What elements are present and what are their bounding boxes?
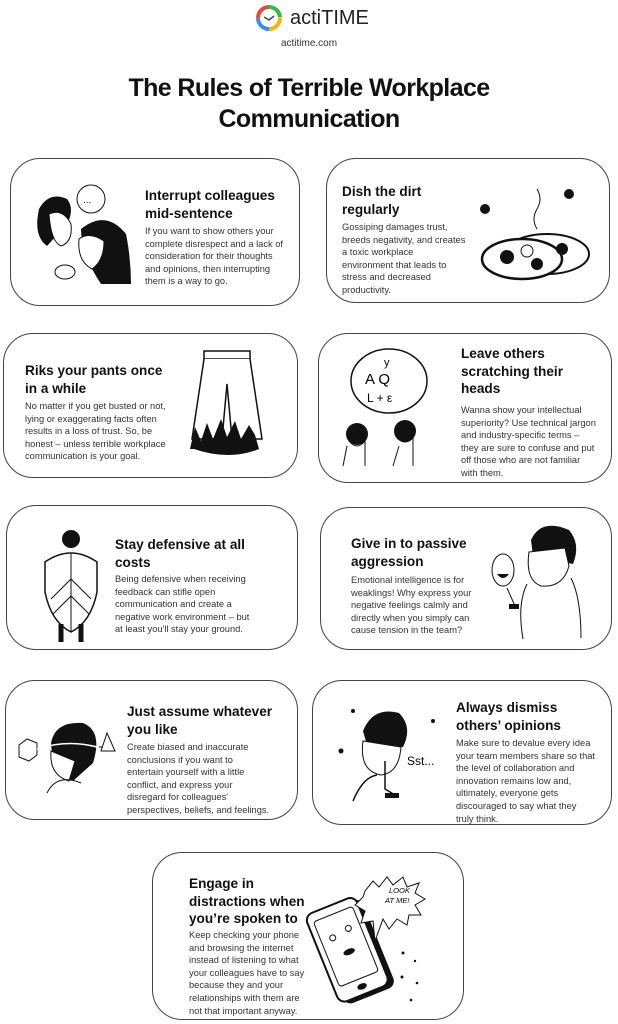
panel: passive aggression [320, 507, 612, 650]
body [127, 742, 269, 815]
illustration: two people talking [37, 184, 131, 284]
illustration: confused people [342, 348, 428, 466]
panel: defensive [6, 505, 298, 650]
heading: others’ opinions [456, 718, 561, 732]
heading: regularly [342, 202, 399, 216]
panel: distractions [152, 852, 464, 1020]
heading: you’re spoken to [189, 911, 298, 926]
panel: interrupt [10, 158, 300, 306]
body: Create biased and inaccurate [127, 742, 248, 752]
body: directly when you simply can [351, 613, 469, 623]
body: the level of collaboration and [456, 763, 574, 773]
heading: in a while [25, 380, 86, 396]
body: stress and decreased [342, 272, 431, 282]
body: communication is your goal. [25, 451, 140, 461]
heading [145, 188, 275, 220]
body: instead of listening to what [189, 955, 299, 965]
body: they are sure to confuse and put [461, 443, 594, 453]
illustration: phone with speech bubble [306, 876, 426, 1004]
body: because they and your [189, 980, 283, 990]
body: ultimately, everyone gets [456, 788, 558, 798]
illustration: plates of food [480, 188, 590, 280]
body: weaklings! Why express your [351, 588, 471, 598]
body: entertain yourself with a little [127, 767, 244, 777]
body: your colleagues have to say [189, 968, 304, 978]
title: The Rules of Terrible Workplace [128, 74, 490, 102]
body: relationships with them are [189, 993, 300, 1003]
body: and industry-specific terms – [461, 430, 579, 440]
body: truly think. [456, 814, 498, 824]
body [115, 574, 250, 634]
heading [25, 363, 162, 396]
illustration: burning pants [190, 350, 263, 455]
heading: heads [461, 381, 500, 396]
heading: scratching their [461, 364, 563, 378]
body: discouraged to say what they [456, 801, 576, 811]
body: negative work environment – but [115, 612, 249, 622]
heading: aggression [351, 554, 424, 568]
heading: distractions when [189, 894, 305, 908]
illustration: confused people: y [384, 357, 390, 369]
panel: dish the dirt [326, 158, 610, 303]
body: No matter if you get busted or not, [25, 401, 166, 411]
body: lying or exaggerating facts often [25, 414, 157, 424]
body: a toxic workplace [342, 247, 413, 257]
body: and opinions, then interrupting [145, 264, 270, 274]
panel: assume [5, 680, 298, 820]
panel: scratching heads [318, 333, 612, 483]
body: off those who are not familiar [461, 455, 580, 465]
body: them is a way to go. [145, 276, 228, 286]
body: with them. [461, 468, 503, 478]
logo [256, 5, 369, 31]
body: conflict, and express your [127, 780, 232, 790]
body [145, 226, 283, 286]
panel: distractions: LOOK [389, 886, 411, 895]
body: cause tension in the team? [351, 625, 462, 635]
body: Wanna show your intellectual [461, 405, 582, 415]
body [456, 738, 595, 824]
body: negative feelings calmly and [351, 600, 468, 610]
illustration: person shushing [338, 709, 435, 802]
heading: Stay defensive at all [115, 537, 245, 552]
heading [127, 704, 272, 737]
body: results in a loss of trust. So, be [25, 426, 152, 436]
body: breeds negativity, and creates [342, 235, 465, 245]
heading: Engage in [189, 876, 254, 891]
heading [456, 700, 561, 733]
heading: Always dismiss [456, 700, 557, 715]
body: innovation remains low and, [456, 776, 571, 786]
body: your team members share so that [456, 751, 595, 761]
title: Communication [218, 105, 400, 133]
body: Being defensive when receiving [115, 574, 246, 584]
logo: actiTIME [290, 7, 369, 29]
panel: distractions: AT ME! [384, 896, 410, 905]
body: Keep checking your phone [189, 930, 299, 940]
heading [189, 876, 305, 926]
illustration: man with shield [44, 530, 98, 642]
body: and browsing the internet [189, 943, 293, 953]
heading [342, 184, 422, 217]
body: not that important anyway. [189, 1006, 297, 1016]
heading: Interrupt colleagues [145, 188, 275, 203]
illustration: head with tangled thought [18, 722, 116, 794]
body [342, 222, 466, 295]
body: Emotional intelligence is for [351, 575, 464, 585]
body [189, 930, 304, 1016]
body [351, 575, 472, 635]
body: productivity. [342, 285, 391, 295]
illustration: confused people: A Q [365, 371, 390, 388]
body [461, 405, 596, 478]
heading: you like [127, 722, 178, 736]
body: communication and create a [115, 599, 232, 609]
heading [115, 537, 245, 570]
body: Make sure to devalue every idea [456, 738, 590, 748]
heading: Leave others [461, 346, 545, 361]
body: at least you'll stay your ground. [115, 624, 243, 634]
illustration: confused people: L + ε [367, 391, 393, 405]
heading: costs [115, 554, 151, 570]
body: perspectives, beliefs, and feelings. [127, 805, 269, 815]
body: honest – unless terrible workplace [25, 439, 166, 449]
illustration: two people talking: ... [83, 195, 91, 206]
heading: mid-sentence [145, 206, 233, 220]
title [128, 74, 490, 133]
panel: pants on fire [3, 333, 298, 478]
body: superiority? Use technical jargon [461, 418, 596, 428]
panel: dismiss opinions [312, 680, 612, 825]
body: disregard for colleagues' [127, 792, 228, 802]
heading [461, 346, 563, 396]
heading: Give in to passive [351, 536, 467, 551]
heading: Riks your pants once [25, 363, 162, 378]
body: If you want to show others your [145, 226, 274, 236]
heading [351, 536, 467, 569]
body: conclusions if you want to [127, 755, 233, 765]
body: environment that leads to [342, 260, 446, 270]
body: Gossiping damages trust, [342, 222, 447, 232]
illustration: person with mask [492, 526, 582, 640]
body [25, 401, 166, 461]
body: consideration for their thoughts [145, 251, 273, 261]
heading: Just assume whatever [127, 704, 272, 719]
heading: Dish the dirt [342, 184, 421, 199]
website: actitime.com [281, 38, 337, 49]
illustration: person shushing: Sst... [407, 754, 434, 768]
body: feedback can stifle open [115, 587, 215, 597]
body: complete disrespect and a lack of [145, 239, 283, 249]
